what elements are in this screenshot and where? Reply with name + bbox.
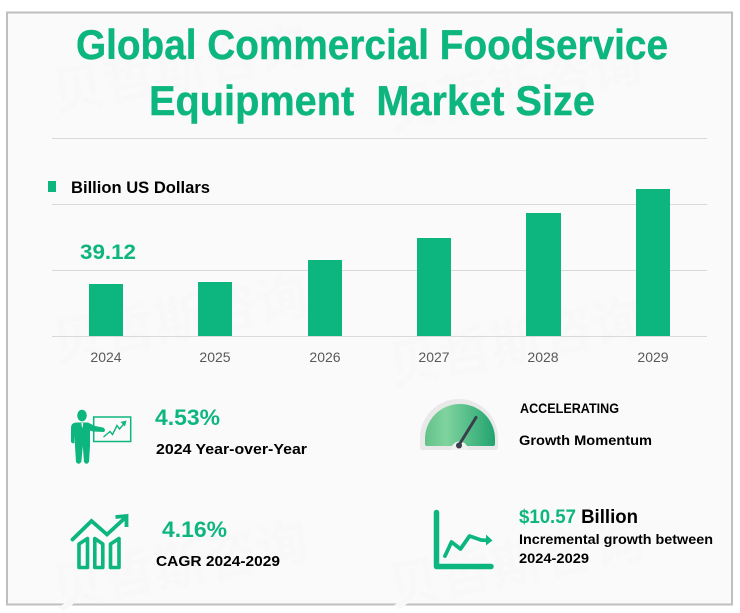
value label 2024: 39.12 [80, 241, 136, 264]
stat: $10.57 billion incremental growth: 2024-2029 [519, 551, 589, 566]
watermarks: 贝哲斯咨询 [383, 290, 650, 397]
stat: accelerating growth momentum: ACCELERATING [520, 401, 619, 416]
bar 2025 [198, 282, 232, 336]
legend: Billion US Dollars: Billion US Dollars [71, 178, 210, 197]
axis labels: 2025 [199, 349, 231, 365]
watermarks [47, 17, 650, 613]
axis labels [90, 349, 669, 365]
title: Global Commercial Foodservice [76, 21, 668, 68]
axis labels: 2024 [90, 349, 122, 365]
stat: 4.16% CAGR [156, 517, 280, 570]
stat: 4.53% year-over-year: 4.53% [155, 405, 220, 430]
title [76, 21, 668, 124]
axis labels: 2027 [418, 349, 450, 365]
stat: 4.16% CAGR: CAGR 2024-2029 [156, 554, 280, 570]
bar 2028 [526, 213, 561, 336]
axis labels: 2028 [527, 349, 559, 365]
bar 2026 [308, 260, 342, 336]
stat: $10.57 billion incremental growth: $10.57 Billion [519, 507, 638, 528]
axis labels: 2029 [637, 349, 669, 365]
icon: line chart axes [436, 512, 492, 566]
axis labels: 2026 [309, 349, 341, 365]
stat: $10.57 billion incremental growth: Incremental growth between [519, 532, 713, 547]
stat: 4.16% CAGR: 4.16% [162, 517, 227, 542]
bar 2029 [636, 189, 670, 336]
stat: accelerating growth momentum [519, 401, 652, 448]
watermarks: 贝哲斯咨询 [47, 17, 314, 124]
watermarks: 贝哲斯咨询 [381, 35, 648, 142]
stat: accelerating growth momentum: Growth Momentum [519, 433, 652, 448]
stat: 4.53% year-over-year [155, 405, 307, 458]
watermarks: 贝哲斯咨询 [47, 267, 314, 374]
bar 2027 [417, 238, 451, 336]
icon: rising arrow over bars [72, 516, 126, 568]
stat: 4.53% year-over-year: 2024 Year-over-Year [156, 442, 307, 458]
stat: $10.57 billion incremental growth [519, 507, 713, 566]
bar chart [52, 189, 707, 365]
icon: presenter with chart board [71, 410, 131, 464]
bar 2024 [89, 284, 123, 336]
icon: gauge [420, 399, 498, 450]
title: Equipment Market Size [149, 77, 595, 124]
